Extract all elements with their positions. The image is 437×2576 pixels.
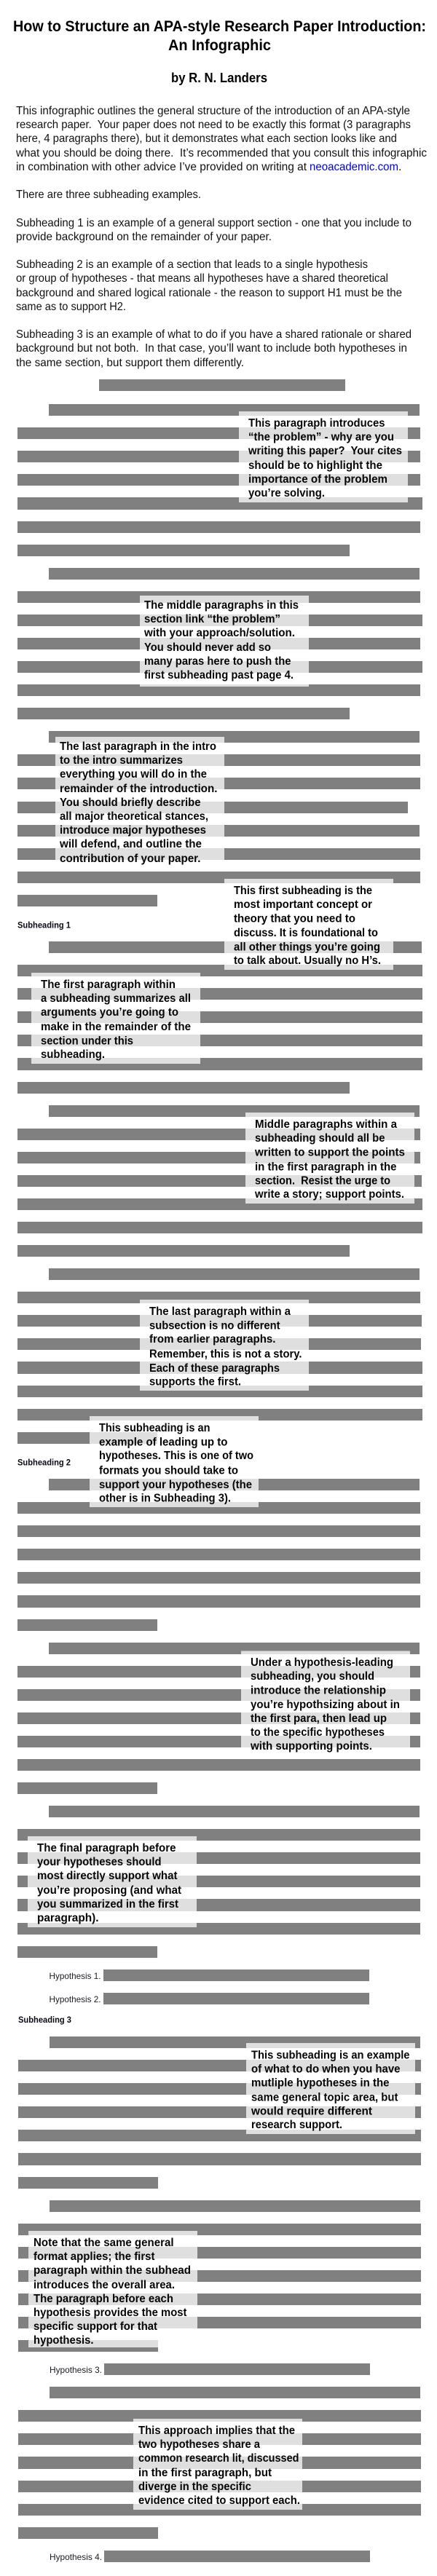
- callout: same general format: hypothesis provides the most: [34, 2307, 187, 2319]
- callout: last paragraph in intro: introduce major hypotheses: [60, 824, 206, 837]
- intro paragraph: research paper. Your paper does not need to be exactly this format (3 paragraphs: [16, 119, 411, 131]
- callout: leading up to hypotheses: formats you should take to: [99, 1465, 238, 1477]
- callout: introduces the problem: writing this paper? Your cites: [248, 445, 402, 457]
- callout: last paragraph in intro: contribution of your paper.: [60, 853, 201, 865]
- callout: last paragraph within subsection: supports the first.: [149, 1376, 241, 1388]
- callout: middle paragraphs within subheading: Middle paragraphs within a: [255, 1118, 397, 1131]
- placeholder: intro paragraph 1: [17, 404, 422, 556]
- callout: same general format: specific support for that: [34, 2320, 158, 2333]
- callout: first subheading: theory that you need to: [234, 913, 355, 925]
- callout: first paragraph within subheading: [31, 973, 200, 1064]
- text: three subheading examples: There are three subheading examples.: [16, 189, 201, 201]
- hypothesis 2: [50, 1993, 369, 2004]
- hypothesis 1: Hypothesis 1.: [50, 1971, 101, 1981]
- callout: last paragraph in intro: The last paragraph in the intro: [60, 740, 216, 753]
- callout: leading up to hypotheses: support your hypotheses (the: [99, 1479, 252, 1491]
- text: subheading 1 description: Subheading 1 is an example of a general support section - one that you include to: [16, 217, 412, 229]
- title: An Infographic: [168, 37, 271, 54]
- callout: common research literature: evidence cited to support each.: [138, 2494, 300, 2507]
- callout: introduces the problem: This paragraph introduces: [248, 417, 385, 430]
- hypothesis 2: Hypothesis 2.: [50, 1994, 101, 2004]
- callout: leading up to hypotheses: [90, 1416, 259, 1507]
- callout: middle paragraphs: [140, 596, 309, 687]
- hypothesis 3: [50, 2363, 370, 2375]
- callout: middle paragraphs: The middle paragraphs in this: [144, 599, 299, 612]
- intro paragraph: what you should be doing there. It’s recommended that you consult this infographic: [15, 147, 427, 159]
- subheading 2 label: Subheading 2: [17, 1459, 71, 1468]
- text: subheading 2 description: background and shared logical rationale - the reason to support H1 must be the: [16, 287, 402, 299]
- callout: first paragraph within subheading: arguments you’re going to: [41, 1006, 178, 1019]
- hypothesis 1: [50, 1969, 369, 1981]
- callout: middle paragraphs: section link “the problem”: [144, 613, 280, 625]
- callout: middle paragraphs within subheading: in the first paragraph in the: [255, 1161, 397, 1174]
- placeholder: subheading 2 final paragraph: [17, 1806, 420, 1958]
- callout: same general format: introduces the overall area.: [34, 2279, 175, 2291]
- callout: same general format: [28, 2231, 197, 2347]
- intro paragraph: This infographic outlines the general structure of the introduction of an APA-style: [16, 105, 410, 117]
- intro paragraph: .: [398, 161, 401, 173]
- callout: last paragraph within subsection: The last paragraph within a: [149, 1305, 291, 1318]
- callout: final paragraph before hypotheses: you’re proposing (and what: [37, 1884, 182, 1897]
- callout: last paragraph in intro: everything you will do in the: [60, 768, 207, 781]
- callout: last paragraph in intro: to the intro summarizes: [60, 754, 183, 767]
- callout: last paragraph within subsection: Each of these paragraphs: [149, 1362, 280, 1375]
- callout: last paragraph within subsection: subsection is no different: [149, 1319, 280, 1332]
- callout: last paragraph within subsection: from earlier paragraphs.: [149, 1333, 275, 1346]
- callout: hypothesis-leading subheading: subheading, you should: [251, 1670, 374, 1683]
- callout: same general format: paragraph within the subhead: [34, 2264, 191, 2277]
- callout: first paragraph within subheading: make in the remainder of the: [41, 1021, 191, 1033]
- intro paragraph: in combination with other advice I’ve provided on writing at: [16, 161, 307, 173]
- callout: common research literature: common research lit, discussed: [138, 2452, 299, 2465]
- callout: middle paragraphs: first subheading past page 4.: [144, 669, 294, 681]
- subheading 1 label: Subheading 1: [17, 922, 71, 931]
- callout: first subheading: to talk about. Usually no H’s.: [234, 955, 381, 967]
- callout: middle paragraphs within subheading: written to support the points: [254, 1146, 405, 1159]
- intro paragraph: neoacademic.com: [310, 161, 398, 173]
- text: subheading 1 description: provide background on the remainder of your paper.: [16, 231, 272, 243]
- callout: final paragraph before hypotheses: The final paragraph before: [37, 1842, 176, 1854]
- callout: hypothesis-leading subheading: introduce the relationship: [251, 1685, 386, 1696]
- text: subheading 3 description: the same section, but support them differently.: [16, 357, 244, 369]
- placeholder: subheading 3 first paragraph: [18, 2036, 421, 2189]
- callout: first paragraph within subheading: The first paragraph within: [41, 979, 176, 991]
- callout: middle paragraphs within subheading: section. Resist the urge to: [255, 1175, 390, 1187]
- callout: first paragraph within subheading: subheading.: [41, 1048, 105, 1061]
- placeholder: intro paragraph 3: [17, 731, 420, 906]
- callout: common research literature: two hypotheses share a: [138, 2438, 260, 2451]
- callout: first subheading: This first subheading is the: [234, 885, 372, 897]
- callout: introduces the problem: importance of the problem: [248, 473, 387, 486]
- text: subheading 2 description: or group of hypotheses - that means all hypotheses have a shared theoretical: [16, 272, 388, 285]
- callout: hypothesis-leading subheading: to the specific hypotheses: [251, 1726, 385, 1739]
- callout: introduces the problem: [239, 411, 408, 502]
- callout: final paragraph before hypotheses: [28, 1836, 197, 1927]
- callout: hypothesis-leading subheading: you’re hypothsizing about in: [251, 1699, 400, 1711]
- callout: middle paragraphs within subheading: [245, 1113, 414, 1204]
- placeholder: subheading 1 middle paragraph: [17, 1105, 422, 1257]
- callout: common research literature: This approach implies that the: [138, 2425, 295, 2437]
- callout: first paragraph within subheading: section under this: [41, 1035, 133, 1047]
- placeholder: subheading 3 second paragraph: [18, 2200, 421, 2352]
- callout: leading up to hypotheses: This subheading is an: [99, 1422, 210, 1434]
- text: subheading 3 description: Subheading 3 is an example of what to do if you have a shared rationale or shared: [16, 328, 412, 341]
- placeholder: subheading 1 first paragraph: [17, 941, 422, 1094]
- callout: last paragraph within subsection: Remember, this is not a story.: [149, 1348, 302, 1360]
- callout: final paragraph before hypotheses: most directly support what: [37, 1870, 178, 1882]
- callout: last paragraph in intro: You should briefly describe: [60, 797, 201, 809]
- text: subheading 2 description: [16, 258, 402, 313]
- callout: first subheading: most important concept or: [234, 898, 372, 911]
- callout: hypothesis-leading subheading: with supporting points.: [250, 1740, 372, 1753]
- callout: multiple hypotheses example: same general topic area, but: [251, 2091, 398, 2104]
- placeholder: intro paragraph 2: [17, 568, 422, 719]
- callout: first paragraph within subheading: a subheading summarizes all: [41, 992, 191, 1005]
- callout: common research literature: diverge in the specific: [138, 2481, 251, 2493]
- callout: introduces the problem: you’re solving.: [248, 487, 325, 499]
- callout: same general format: format applies; the first: [34, 2251, 155, 2263]
- callout: common research literature: [133, 2419, 302, 2510]
- callout: first subheading: all other things you’re going: [234, 941, 380, 954]
- callout: multiple hypotheses example: research support.: [251, 2119, 342, 2131]
- intro paragraph: [15, 105, 427, 173]
- text: subheading 2 description: Subheading 2 is an example of a section that leads to a single hypothesis: [16, 258, 368, 271]
- callout: same general format: hypothesis.: [34, 2334, 93, 2347]
- placeholder: subheading 2 first paragraph: [17, 1479, 420, 1631]
- placeholder: subheading 3 third paragraph: [18, 2387, 421, 2539]
- callout: leading up to hypotheses: other is in Subheading 3).: [99, 1493, 231, 1504]
- hypothesis 4: Hypothesis 4.: [50, 2552, 102, 2562]
- callout: middle paragraphs: You should never add so: [144, 641, 271, 654]
- callout: last paragraph in intro: remainder of the introduction.: [60, 783, 217, 795]
- title: [13, 18, 426, 54]
- callout: middle paragraphs within subheading: subheading should all be: [255, 1132, 385, 1145]
- author byline: by R. N. Landers: [171, 70, 267, 85]
- callout: middle paragraphs within subheading: write a story; support points.: [254, 1188, 404, 1201]
- placeholder: subheading 1 last paragraph: [17, 1268, 422, 1444]
- callout: last paragraph in intro: will defend, and outline the: [59, 838, 202, 850]
- callout: multiple hypotheses example: would require different: [251, 2106, 373, 2117]
- callout: final paragraph before hypotheses: paragraph).: [37, 1912, 99, 1924]
- callout: first subheading: discuss. It is foundational to: [234, 927, 378, 939]
- hypothesis 3: Hypothesis 3.: [50, 2365, 102, 2375]
- callout: multiple hypotheses example: mutliple hypotheses in the: [251, 2077, 390, 2090]
- placeholder: paper title bar: [99, 379, 345, 391]
- callout: final paragraph before hypotheses: you summarized in the first: [37, 1898, 179, 1911]
- text: subheading 1 description: [16, 217, 412, 243]
- callout: final paragraph before hypotheses: your hypotheses should: [37, 1856, 162, 1868]
- placeholder: subheading 2 second paragraph: [17, 1643, 420, 1794]
- text: subheading 3 description: [16, 328, 412, 369]
- callout: first subheading: [224, 879, 393, 970]
- callout: hypothesis-leading subheading: Under a hypothesis-leading: [251, 1656, 393, 1669]
- intro paragraph: here, 4 paragraphs there), but it demonstrates what each section looks like and: [16, 133, 397, 145]
- text: subheading 3 description: background but not both. In that case, you’ll want to include both hypotheses in: [16, 342, 407, 355]
- callout: last paragraph in intro: all major theoretical stances,: [60, 810, 208, 823]
- callout: last paragraph in intro: [55, 737, 224, 866]
- hypothesis 4: [50, 2551, 370, 2562]
- callout: multiple hypotheses example: [246, 2043, 415, 2134]
- callout: leading up to hypotheses: hypotheses. This is one of two: [99, 1450, 253, 1462]
- callout: introduces the problem: should be to highlight the: [248, 459, 382, 472]
- callout: same general format: Note that the same general: [34, 2237, 173, 2249]
- callout: common research literature: in the first paragraph, but: [138, 2467, 272, 2479]
- callout: last paragraph within subsection: [140, 1300, 309, 1391]
- callout: same general format: The paragraph before each: [34, 2293, 173, 2305]
- callout: multiple hypotheses example: This subheading is an example: [251, 2049, 410, 2062]
- callout: leading up to hypotheses: example of leading up to: [99, 1436, 228, 1449]
- subheading 3 label: Subheading 3: [18, 2016, 71, 2025]
- callout: middle paragraphs: with your approach/solution.: [143, 627, 295, 639]
- callout: hypothesis-leading subheading: [241, 1651, 410, 1753]
- callout: multiple hypotheses example: of what to do when you have: [251, 2063, 401, 2075]
- callout: introduces the problem: “the problem” - why are you: [248, 431, 394, 443]
- callout: middle paragraphs: many paras here to push the: [144, 655, 291, 668]
- text: subheading 2 description: same as to support H2.: [16, 301, 126, 313]
- callout: hypothesis-leading subheading: the first para, then lead up: [251, 1712, 387, 1725]
